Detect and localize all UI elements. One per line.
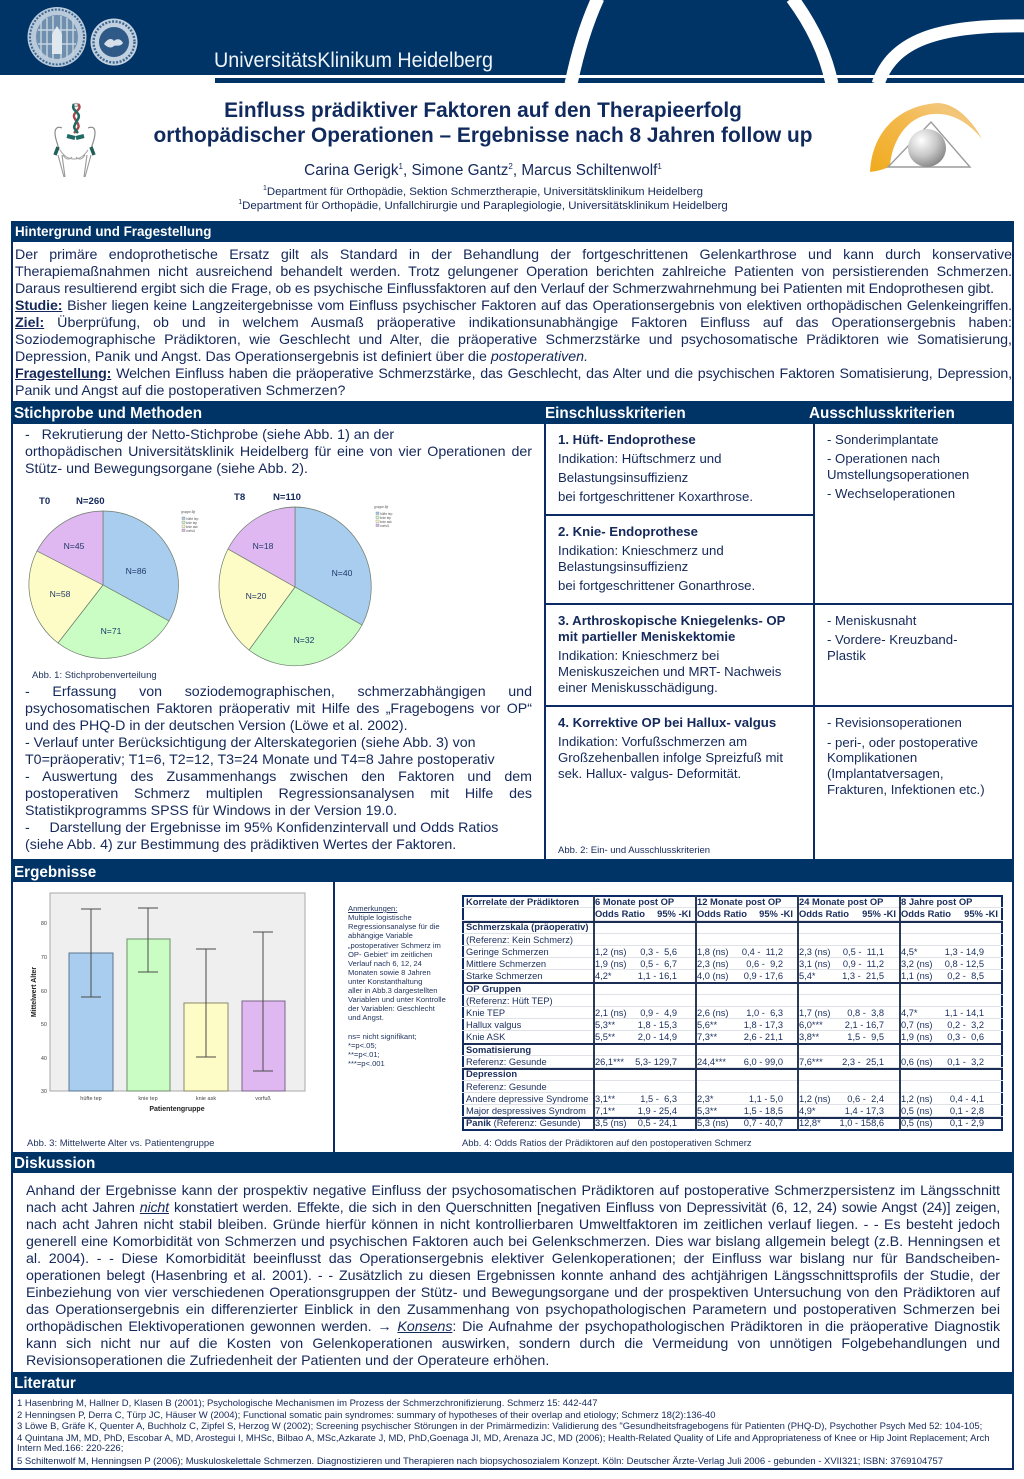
references: 3 Löwe B, Gräfe K, Quenter A, Buchholz C, Zipfel S, Herzog W (2002); Screening psychischer Störungen in der Primärmedizin: Validierung des "Gesundheitsfragebogens für Patienten (PHQ-D), Psychother Psych Med 52: 104-105; xyxy=(17,1421,982,1432)
table: odds ratios: 2,6 (ns) xyxy=(697,1008,729,1018)
table: odds ratios: 1,9 - 25,4 xyxy=(638,1106,677,1116)
exclusions for prostheses: - Wechseloperationen xyxy=(827,486,955,501)
table: odds ratios: 2,1 - 16,7 xyxy=(845,1020,884,1030)
pie legends: vorfuß xyxy=(380,524,389,528)
discussion text: al. 2004). - - Diese Komorbidität beeinflusst das Operationsergebnis elektiver Gelenkoperationen; der Einfluss war bislang nur für Bandscheiben- xyxy=(26,1250,1000,1266)
discussion text: Revisionsoperationen die Zufriedenheit der Patienten und der Operateure erhöhen. xyxy=(26,1352,549,1368)
text: Anmerkungen: Multiple logistische xyxy=(348,913,412,922)
table: odds ratios: 8 Jahre post OP xyxy=(901,896,972,907)
pie legends: gruppe.8jr xyxy=(374,505,389,509)
table: odds ratios: Panik (Referenz: Gesunde) xyxy=(466,1117,580,1128)
table: odds ratios: 5,6** xyxy=(697,1020,717,1030)
icon: pelvis and spine xyxy=(53,102,96,178)
table: odds ratios: 3,1 (ns) xyxy=(799,959,831,969)
table: odds ratios: 1,7 (ns) xyxy=(799,1008,831,1018)
table: odds ratios: Hallux valgus xyxy=(466,1020,521,1030)
table: odds ratios: 1,2 (ns) xyxy=(901,1094,933,1104)
table: odds ratios: 3,1** xyxy=(595,1094,615,1104)
x axis: knie tep xyxy=(138,1096,158,1102)
exclusions for hallux valgus: Komplikationen xyxy=(827,750,917,765)
table: odds ratios: 3,8** xyxy=(799,1032,819,1042)
table: odds ratios: 4,2* xyxy=(595,971,612,981)
pie titles: T8 xyxy=(234,492,246,503)
table: odds ratios: 2,6 - 21,1 xyxy=(744,1032,783,1042)
card: Korrektive OP bei Hallux valgus: sek. Hallux- valgus- Deformität. xyxy=(558,766,741,781)
background text: Daraus resultierend ergibt sich die Frage, ob es psychische Einflussfaktoren auf den Verlauf der Schmerzwahrnehmung bei Patienten mit Endoprothesen gibt. xyxy=(15,280,994,296)
table: odds ratios: 24,4*** xyxy=(697,1057,726,1067)
table: odds ratios: 1,4 - 17,3 xyxy=(845,1106,884,1116)
text: Anmerkungen: ***=p<.001 xyxy=(348,1059,385,1068)
text: Anmerkungen: der Variablen: Geschlecht xyxy=(348,1004,435,1013)
card: Korrektive OP bei Hallux valgus: Abb. 2: Ein- und Ausschlusskriterien xyxy=(558,845,710,856)
pie labels: N=45 xyxy=(64,541,85,551)
table: odds ratios: 1,9 (ns) xyxy=(901,1032,933,1042)
pie legends: knie tep xyxy=(186,521,197,525)
table: odds ratios: 5,4* xyxy=(799,971,816,981)
table: odds ratios: 1,1 - 16,1 xyxy=(638,971,677,981)
table: odds ratios: 0,5 - 11,1 xyxy=(843,947,884,957)
card: Arthroskopische Kniegelenks-OP: 3. Arthroskopische Kniegelenks- OP xyxy=(558,613,785,628)
table: odds ratios: 1,3 - 21,5 xyxy=(842,971,884,981)
text: Erfassung, Verlauf, Auswertung: - Verlauf unter Berücksichtigung der Alterskategorien (siehe Abb. 3) von xyxy=(25,734,476,750)
pie legends: gruppe.8jr xyxy=(181,510,196,514)
table: odds ratios: OP Gruppen xyxy=(466,983,521,994)
text: Anmerkungen: Anmerkungen: xyxy=(348,904,397,913)
exclusions for hallux valgus xyxy=(827,715,985,797)
heading: Ausschlusskriterien: Ausschlusskriterien xyxy=(809,405,955,422)
card: Knie-Endoprothese: Belastungsinsuffizienz xyxy=(558,559,688,574)
text: Rekrutierung: Stütz- und Bewegungsorgane (siehe Abb. 2). xyxy=(25,460,308,476)
text: Anmerkungen: ns= nicht signifikant; xyxy=(348,1032,417,1041)
table: odds ratios: 4,7* xyxy=(901,1008,918,1018)
card: Arthroskopische Kniegelenks-OP: Meniskuszeichen und MRT- Nachweis xyxy=(558,664,781,679)
card: Hüft-Endoprothese: bei fortgeschrittener Koxarthrose. xyxy=(558,489,753,504)
table: odds ratios: 7,6*** xyxy=(799,1057,823,1067)
table: odds ratios xyxy=(462,895,1003,1131)
pie labels xyxy=(50,541,353,645)
background text: Studie: Bisher liegen keine Langzeitergebnisse vom Einfluss psychischer Faktoren auf das Operationsergebnis von elektiven orthopädischen Gelenkeingriffen. xyxy=(15,298,1012,314)
table: odds ratios: Knie TEP xyxy=(466,1008,505,1018)
table: odds ratios: 1,1 - 5,0 xyxy=(749,1094,783,1104)
exclusions for arthroscopy: - Vordere- Kreuzband- xyxy=(827,632,957,647)
pie titles: T0 xyxy=(39,496,50,507)
exclusions for arthroscopy: Plastik xyxy=(827,648,866,663)
background text xyxy=(15,246,1012,398)
text: Anmerkungen: *=p<.05; xyxy=(348,1041,377,1050)
bar chart: Mittelwerte Alter: Patientengruppe xyxy=(149,1106,205,1113)
caption: Abb. 4: Abb. 4: Odds Ratios der Prädiktoren auf den postoperativen Schmerz xyxy=(462,1137,752,1148)
card: Korrektive OP bei Hallux valgus: Großzehenballen infolge Spreizfuß mit xyxy=(558,750,783,765)
text: Anmerkungen: unter Konstanthaltung xyxy=(348,977,422,986)
pie labels: N=71 xyxy=(101,626,122,636)
heading: Diskussion: Diskussion xyxy=(14,1155,95,1172)
table: odds ratios: 26,1*** xyxy=(595,1057,624,1067)
text: Erfassung, Verlauf, Auswertung: Statistikprogramms SPSS für Windows in der Version 19.0. xyxy=(25,802,397,818)
table: odds ratios: 2,1 (ns) xyxy=(595,1008,627,1018)
table: odds ratios: (Referenz: Kein Schmerz) xyxy=(466,935,573,945)
discussion text: nach acht Jahren nicht konstatiert werden. Effekte, die sich in den Querschnitten [negativen Einfluss von Depressivität (6, 12, 24) sowie Angst (24)] zeigen, xyxy=(26,1200,1000,1216)
references: 2 Henningsen P, Derra C, Türp JC, Häuser W (2004); Functional somatic pain syndromes: summary of hypotheses of their overlap and etiology; Schmerz 18(2):136-40 xyxy=(17,1410,716,1421)
text: Anmerkungen: „postoperativer Schmerz im xyxy=(348,941,441,950)
text: Anmerkungen: **=p<.01; xyxy=(348,1050,380,1059)
heading: Hintergrund und Fragestellung: Hintergrund und Fragestellung xyxy=(15,224,211,239)
table: odds ratios: 1,8 - 15,3 xyxy=(638,1020,677,1030)
bar chart: Mittelwerte Alter: Mittelwert Alter xyxy=(31,967,38,1017)
card: Korrektive OP bei Hallux valgus xyxy=(558,715,783,856)
bar chart: Mittelwerte Alter xyxy=(27,892,306,1149)
table: odds ratios: 6,0*** xyxy=(799,1020,823,1030)
y axis: 50 xyxy=(41,1022,47,1028)
discussion text: orthopädischen Elektivoperationen gewonnen werden. → Konsens: Die Aufnahme der psychopathologischen Prädiktoren in die präoperative Diagnostik xyxy=(26,1318,1000,1334)
x axis: knie ask xyxy=(196,1096,216,1102)
table: odds ratios: 12,8* xyxy=(799,1118,821,1128)
card: Knie-Endoprothese: 2. Knie- Endoprothese xyxy=(558,524,698,539)
table: odds ratios: 1,2 (ns) xyxy=(799,1094,831,1104)
panel: Literatur xyxy=(11,1372,1014,1470)
table: odds ratios: Odds Ratio xyxy=(799,908,849,919)
table: odds ratios: 1,5 - 6,3 xyxy=(640,1094,677,1104)
table: odds ratios: 7,3** xyxy=(697,1032,717,1042)
y axis: 30 xyxy=(41,1089,47,1095)
table: odds ratios: 5,3- 129,7 xyxy=(635,1057,677,1067)
table: odds ratios: 0,7 (ns) xyxy=(901,1020,933,1030)
heading: Stichprobe und Methoden xyxy=(11,401,544,424)
table: odds ratios: 1,8 (ns) xyxy=(697,947,729,957)
heading: Diskussion xyxy=(11,1152,1014,1173)
background text: Therapiemaßnahmen nicht ausreichend behandelt werden. Trotz gelungener Operation berichten zahlreiche Patienten von persistierenden Schmerzen. xyxy=(15,264,1012,280)
table: odds ratios: Depression xyxy=(466,1068,517,1079)
discussion text xyxy=(26,1182,1000,1368)
pie legends: vorfuß xyxy=(186,529,195,533)
heading: Ergebnisse xyxy=(11,859,1014,882)
pie labels: N=18 xyxy=(253,541,274,551)
table: odds ratios: Geringe Schmerzen xyxy=(466,947,549,957)
y axis: 80 xyxy=(41,921,47,927)
text: Anmerkungen: und Angst. xyxy=(348,1013,384,1022)
text: Erfassung, Verlauf, Auswertung: psychosomatischen Faktoren präoperativ mit Hilfe des „Fragebogens vor OP“ xyxy=(25,700,532,716)
table: odds ratios: 1,9 (ns) xyxy=(595,959,627,969)
references xyxy=(17,1398,990,1467)
pie legends xyxy=(181,505,393,533)
table: odds ratios: 0,5 - 24,1 xyxy=(638,1118,677,1128)
authors: Carina Gerigk1, Simone Gantz2, Marcus Schiltenwolf1 xyxy=(304,162,662,179)
pie titles: N=260 xyxy=(76,496,105,507)
pie labels: N=58 xyxy=(50,589,71,599)
panel: Einschlusskriterien xyxy=(544,401,813,859)
pie labels: N=20 xyxy=(246,591,267,601)
table: odds ratios: 0,9 - 17,6 xyxy=(744,971,783,981)
table: odds ratios: Somatisierung xyxy=(466,1044,531,1055)
heading: Ausschlusskriterien xyxy=(809,401,1014,424)
panel: Ausschlusskriterien xyxy=(813,401,1014,859)
header banner xyxy=(0,0,1024,83)
exclusions for prostheses xyxy=(813,424,1014,605)
y axis: 40 xyxy=(41,1056,47,1062)
discussion text: nach acht Jahren nicht stabil bleiben. Gründe hierfür können in nicht kontrollierbaren Umweltfaktoren im zeitlichen verlauf liegen. - - Es besteht jedoch xyxy=(26,1216,1000,1232)
heading: Literatur xyxy=(11,1372,1014,1394)
x axis xyxy=(80,1096,271,1102)
references: Intern Med.166: 220-226; xyxy=(17,1443,123,1454)
card: Knie-Endoprothese xyxy=(544,516,813,605)
panel: Hintergrund und Fragestellung xyxy=(11,221,1014,401)
table: odds ratios: 0,6 (ns) xyxy=(901,1057,933,1067)
table: odds ratios: Mittlere Schmerzen xyxy=(466,959,546,969)
table: odds ratios: 0,5 (ns) xyxy=(901,1118,933,1128)
table: odds ratios: 12 Monate post OP xyxy=(697,896,781,907)
y axis xyxy=(41,921,47,1095)
table: odds ratios: 2,3* xyxy=(697,1094,714,1104)
background text: Der primäre endoprothetische Ersatz gilt als Standard in der Behandlung der fortgeschrittenen Gelenkarthrose und kann durch konservative xyxy=(15,246,1012,262)
table: odds ratios: 95% -KI xyxy=(964,908,998,919)
chart: pie charts sample distribution xyxy=(28,492,393,681)
table: odds ratios: 1,5 - 9,5 xyxy=(847,1032,884,1042)
pie legends: knie ask xyxy=(186,525,198,529)
pie legends: hüfte tep xyxy=(380,512,393,516)
text: Anmerkungen: OP- Gebiet“ im zeitlichen xyxy=(348,950,432,959)
pie labels: N=32 xyxy=(294,635,315,645)
affiliations: 1Department für Orthopädie, Sektion Schmerztherapie, Universitätsklinikum Heidelberg xyxy=(263,185,703,198)
pie legends: knie ask xyxy=(380,520,392,524)
caption: Abb. 1: Abb. 1: Stichprobenverteilung xyxy=(32,670,157,681)
discussion text: kann sich nicht nur auf die Kosten von Gelenkoperationen auswirken, sondern durch die Vermeidung von unnötigen Folgebehandlungen und xyxy=(26,1336,1000,1352)
card: Arthroskopische Kniegelenks-OP: mit partieller Meniskektomie xyxy=(558,629,735,644)
table: odds ratios: 2,3 (ns) xyxy=(697,959,729,969)
text: Anmerkungen: abhängige Variable xyxy=(348,931,413,940)
card: Knie-Endoprothese: bei fortgeschrittener Gonarthrose. xyxy=(558,578,755,593)
table: odds ratios: 5,5** xyxy=(595,1032,615,1042)
table: odds ratios: 1,1 - 14,1 xyxy=(945,1008,984,1018)
table: odds ratios: 0,8 - 12,5 xyxy=(945,959,984,969)
discussion text: operationen belegt (Hasenbring et al. 2001). - - Zusätzlich zu diesen Ergebnissen konnte anhand des achtjährigen Längsschnittsprofils der Studie, der xyxy=(26,1268,1000,1284)
table: odds ratios: 0,2 - 3,2 xyxy=(947,1020,984,1030)
table: odds ratios: 0,4 - 4,1 xyxy=(950,1094,984,1104)
table: odds ratios: 0,6 - 2,4 xyxy=(847,1094,884,1104)
exclusions for arthroscopy: - Meniskusnaht xyxy=(827,613,916,628)
exclusions for hallux valgus: (Implantatversagen, xyxy=(827,766,944,781)
heading: Stichprobe und Methoden: Stichprobe und Methoden xyxy=(14,405,202,422)
text: Erfassung, Verlauf, Auswertung: (siehe Abb. 4) zur Bestimmung des prädiktiven Wertes der Faktoren. xyxy=(25,836,456,852)
icon: clinic seal xyxy=(90,18,138,66)
text: Erfassung, Verlauf, Auswertung xyxy=(25,684,532,852)
card: Hüft-Endoprothese: Indikation: Hüftschmerz und xyxy=(558,451,721,466)
pie chart T8 xyxy=(219,507,371,666)
card: Arthroskopische Kniegelenks-OP: Indikation: Knieschmerz bei xyxy=(558,648,719,663)
pie legends: hüfte tep xyxy=(186,517,199,521)
table: odds ratios: 0,9 - 11,2 xyxy=(843,959,884,969)
table: odds ratios: 0,4 - 11,2 xyxy=(742,947,783,957)
discussion text: das Operationsergebnis ein differenzierter Einblick in den Zusammenhang von psychopathologischen Parametern und postoperativen Schmerzen bei xyxy=(26,1302,1000,1318)
text: Erfassung, Verlauf, Auswertung: - Darstellung der Ergebnisse im 95% Konfidenzintervall und Odds Ratios xyxy=(25,820,498,836)
exclusions for prostheses: Umstellungsoperationen xyxy=(827,467,969,482)
exclusions for arthroscopy xyxy=(813,605,1014,707)
pie labels: N=40 xyxy=(332,568,353,578)
card: Hüft-Endoprothese: 1. Hüft- Endoprothese xyxy=(558,432,696,447)
text: Rekrutierung: orthopädischen Universitätsklinik Heidelberg für eine von vier Operationen der xyxy=(25,444,532,460)
text: Erfassung, Verlauf, Auswertung: T0=präoperativ; T1=6, T2=12, T3=24 Monate und T4=8 Jahre postoperativ xyxy=(25,752,495,768)
title: Einfluss prädiktiver Faktoren auf den Therapieerfolg xyxy=(224,99,742,122)
pie titles: N=110 xyxy=(273,492,301,503)
text: Rekrutierung xyxy=(25,426,532,476)
table: odds ratios: Starke Schmerzen xyxy=(466,971,542,981)
y axis: 60 xyxy=(41,989,47,995)
text: Anmerkungen: Verlauf nach 6, 12, 24 xyxy=(348,959,422,968)
table: odds ratios: 4,9* xyxy=(799,1106,816,1116)
affiliations xyxy=(238,185,728,212)
panel: Diskussion xyxy=(11,1152,1014,1372)
references: 5 Schiltenwolf M, Henningsen P (2006); Muskuloskelettale Schmerzen. Diagnostizieren und Therapieren nach biopsychosozialem Konzept. Köln: Deutscher Ärzte-Verlag Juli 2006 - gebunden - XVII321; ISBN: 3769104757 xyxy=(17,1456,943,1467)
card: Arthroskopische Kniegelenks-OP: einer Meniskusschädigung. xyxy=(558,680,718,695)
table: odds ratios: 0,5 (ns) xyxy=(901,1106,933,1116)
table: odds ratios: Knie ASK xyxy=(466,1032,505,1042)
table: odds ratios: 0,1 - 2,8 xyxy=(950,1106,984,1116)
table: odds ratios: Referenz: Gesunde xyxy=(466,1057,547,1067)
x axis: vorfuß xyxy=(255,1096,271,1102)
title xyxy=(153,99,813,147)
table: odds ratios: Odds Ratio xyxy=(595,908,645,919)
text: Anmerkungen: Monaten sowie 8 Jahren xyxy=(348,968,431,977)
table: odds ratios: 3,5 (ns) xyxy=(595,1118,627,1128)
table: odds ratios: 2,3 (ns) xyxy=(799,947,831,957)
background text: Depression, Panik und Angst. Das Operationsergebnis ist definiert über die postoperativen. xyxy=(15,348,588,364)
exclusions for hallux valgus: - peri-, oder postoperative xyxy=(827,735,978,750)
table: odds ratios: 95% -KI xyxy=(657,908,691,919)
text: Anmerkungen: aller in Abb.3 dargestellten xyxy=(348,986,438,995)
background text: Soziodemographische Prädiktoren, wie Geschlecht und Alter, die präoperative Schmerzstärke und psychosomatische Prädiktoren wie Somatisierung, xyxy=(15,332,1012,348)
divider between chart and table xyxy=(333,882,335,1152)
text: Rekrutierung: - Rekrutierung der Netto-Stichprobe (siehe Abb. 1) an der xyxy=(25,426,394,442)
table: odds ratios: 0,1 - 3,2 xyxy=(947,1057,984,1067)
table: odds ratios: 1,3 - 14,9 xyxy=(945,947,984,957)
references: 1 Hasenbring M, Hallner D, Klasen B (2001); Psychologische Mechanismen im Prozess der Schmerzchronifizierung. Schmerz 15: 442-447 xyxy=(17,1398,598,1409)
table: odds ratios: 4,0 (ns) xyxy=(697,971,729,981)
table: odds ratios: Andere depressive Syndrome xyxy=(466,1094,588,1104)
table: odds ratios: 5,3** xyxy=(595,1020,615,1030)
table: odds ratios: 6,0 - 99,0 xyxy=(744,1057,783,1067)
pie legends: knie tep xyxy=(380,516,391,520)
card: Korrektive OP bei Hallux valgus: Indikation: Vorfußschmerzen am xyxy=(558,734,747,749)
table: odds ratios: 6 Monate post OP xyxy=(595,896,674,907)
table: odds ratios: Major despressives Syndrom xyxy=(466,1106,586,1116)
table: odds ratios: Odds Ratio xyxy=(901,908,951,919)
table: odds ratios: Korrelate der Prädiktoren xyxy=(466,896,579,907)
table: odds ratios: 5,3 (ns) xyxy=(697,1118,729,1128)
table: odds ratios: 5,3** xyxy=(697,1106,717,1116)
table: odds ratios: 0,8 - 3,8 xyxy=(847,1008,884,1018)
heading: Literatur: Literatur xyxy=(14,1375,76,1392)
text: Erfassung, Verlauf, Auswertung: und des PHQ-D in der deutschen Version (Löwe et al. 2002). xyxy=(25,718,408,734)
card: Arthroskopische Kniegelenks-OP xyxy=(544,605,813,707)
pie chart T0 xyxy=(29,511,178,658)
table: odds ratios: 0,3 - 5,6 xyxy=(640,947,677,957)
affiliations: 1Department für Orthopädie, Unfallchirurgie und Paraplegiologie, Universitätsklinikum Heidelberg xyxy=(238,199,728,212)
table: odds ratios: 1,0 - 158,6 xyxy=(840,1118,884,1128)
table: odds ratios: 4,5* xyxy=(901,947,918,957)
card: Korrektive OP bei Hallux valgus: 4. Korrektive OP bei Hallux- valgus xyxy=(558,715,776,730)
text: Erfassung, Verlauf, Auswertung: postoperativen Schmerz multiplen Regressionsanalysen mit Hilfe des xyxy=(25,786,532,802)
text: Anmerkungen: Regressionsanalyse für die xyxy=(348,922,440,931)
pie labels: N=86 xyxy=(126,566,147,576)
table: odds ratios: 0,6 - 9,2 xyxy=(746,959,783,969)
text: Erfassung, Verlauf, Auswertung: - Auswertung des Zusammenhangs zwischen den Faktoren und dem xyxy=(25,768,532,784)
text: Anmerkungen xyxy=(348,904,446,1068)
y axis: 70 xyxy=(41,955,47,961)
wordmark: UniversitätsKlinikum Heidelberg xyxy=(214,49,493,72)
table: odds ratios: 7,1** xyxy=(595,1106,615,1116)
table: odds ratios: 1,8 - 17,3 xyxy=(744,1020,783,1030)
table: odds ratios: (Referenz: Hüft TEP) xyxy=(466,996,553,1006)
text: Erfassung, Verlauf, Auswertung: - Erfassung von soziodemographischen, schmerzabhängigen und xyxy=(25,684,532,700)
table: odds ratios: 0,7 - 40,7 xyxy=(744,1118,783,1128)
table: odds ratios: 0,2 - 8,5 xyxy=(947,971,984,981)
discussion text: generell eine Komorbidität von Schmerzen und psychischen Faktoren auch bei Gelenkschmerzen. Dies war bislang allgemein belegt (z.B. Henningsen et xyxy=(26,1234,1000,1250)
table: odds ratios: 0,1 - 2,9 xyxy=(950,1118,984,1128)
error bars xyxy=(81,908,273,1071)
background text: Panik und Angst auf die postoperativen Schmerzen? xyxy=(15,382,345,398)
panel: Stichprobe und Methoden xyxy=(11,401,544,859)
table: odds ratios: 95% -KI xyxy=(759,908,793,919)
heading: Hintergrund und Fragestellung xyxy=(11,221,1014,242)
card: Hüft-Endoprothese xyxy=(544,424,813,516)
heading: Einschlusskriterien xyxy=(544,401,813,424)
card: Knie-Endoprothese: Indikation: Knieschmerz und xyxy=(558,543,724,558)
heading: Ergebnisse: Ergebnisse xyxy=(14,864,96,881)
exclusions for prostheses: - Operationen nach xyxy=(827,451,940,466)
background text: Fragestellung: Welchen Einfluss haben die präoperative Schmerzstärke, das Geschlecht, das Alter und die psychischen Faktoren Somatisierung, Depression, xyxy=(15,366,1012,382)
table: odds ratios: 1,5 - 18,5 xyxy=(744,1106,783,1116)
panel: Ergebnisse xyxy=(11,859,1014,1152)
heading: Einschlusskriterien: Einschlusskriterien xyxy=(545,405,686,422)
discussion text: Anhand der Ergebnisse kann der prospektiv negative Einfluss der psychosomatischen Prädiktoren auf postoperative Schmerzpersistenz im Längsschnitt xyxy=(26,1182,1000,1198)
exclusions for prostheses: - Sonderimplantate xyxy=(827,432,938,447)
table: odds ratios: 1,2 (ns) xyxy=(595,947,627,957)
table: odds ratios: 0,9 - 4,9 xyxy=(640,1008,677,1018)
table: odds ratios: Odds Ratio xyxy=(697,908,747,919)
table: odds ratios: 2,0 - 14,9 xyxy=(638,1032,677,1042)
table: odds ratios: Referenz: Gesunde xyxy=(466,1082,547,1092)
table: odds ratios: 95% -KI xyxy=(862,908,896,919)
discussion text: Einbeziehung von vier verschiedenen Operationsgruppen der Stütz- und Bewegungsorgane und der prospektiven Untersuchung von den Prädiktoren auf xyxy=(26,1284,1000,1300)
text: Anmerkungen: Variablen und unter Kontrolle xyxy=(348,995,446,1004)
icon: Heidelberg university seal xyxy=(28,7,86,67)
caption: Abb. 3: Abb. 3: Mittelwerte Alter vs. Patientengruppe xyxy=(27,1138,214,1149)
background text: Ziel: Überprüfung, ob und in welchem Ausmaß präoperative indikationsunabhängige Faktoren Einfluss auf das Operationsergebnis haben: xyxy=(15,314,1012,330)
table: odds ratios: 24 Monate post OP xyxy=(799,896,883,907)
table: odds ratios: 3,2 (ns) xyxy=(901,959,933,969)
table: odds ratios: 0,5 - 6,7 xyxy=(640,959,677,969)
table: odds ratios: 1,0 - 6,3 xyxy=(746,1008,783,1018)
pie titles xyxy=(39,492,301,507)
references: 4 Quintana JM, MD, PhD, Escobar A, MD, Arostegui I, MHSc, Bilbao A, MSc,Azkarate J, MD, PhD,Goenaga JI, MD, Arenaza JC, MD (2006); Health-Related Quality of Life and Appropriateness of Knee or Hip Joint Replacement; Arch xyxy=(17,1433,990,1444)
table: odds ratios: 0,3 - 0,6 xyxy=(947,1032,984,1042)
table: odds ratios: 1,1 (ns) xyxy=(901,971,933,981)
table: odds ratios: 2,3 - 25,1 xyxy=(842,1057,884,1067)
card: Hüft-Endoprothese: Belastungsinsuffizienz xyxy=(558,470,688,485)
exclusions for hallux valgus: - Revisionsoperationen xyxy=(827,715,962,730)
icon: gold arc with triangle and sphere logo xyxy=(870,103,982,172)
x axis: hüfte tep xyxy=(80,1096,102,1102)
title: orthopädischer Operationen – Ergebnisse nach 8 Jahren follow up xyxy=(153,124,813,147)
exclusions for hallux valgus: Frakturen, Infektionen etc.) xyxy=(827,782,985,797)
table: odds ratios: Schmerzskala (präoperativ) xyxy=(466,921,588,932)
